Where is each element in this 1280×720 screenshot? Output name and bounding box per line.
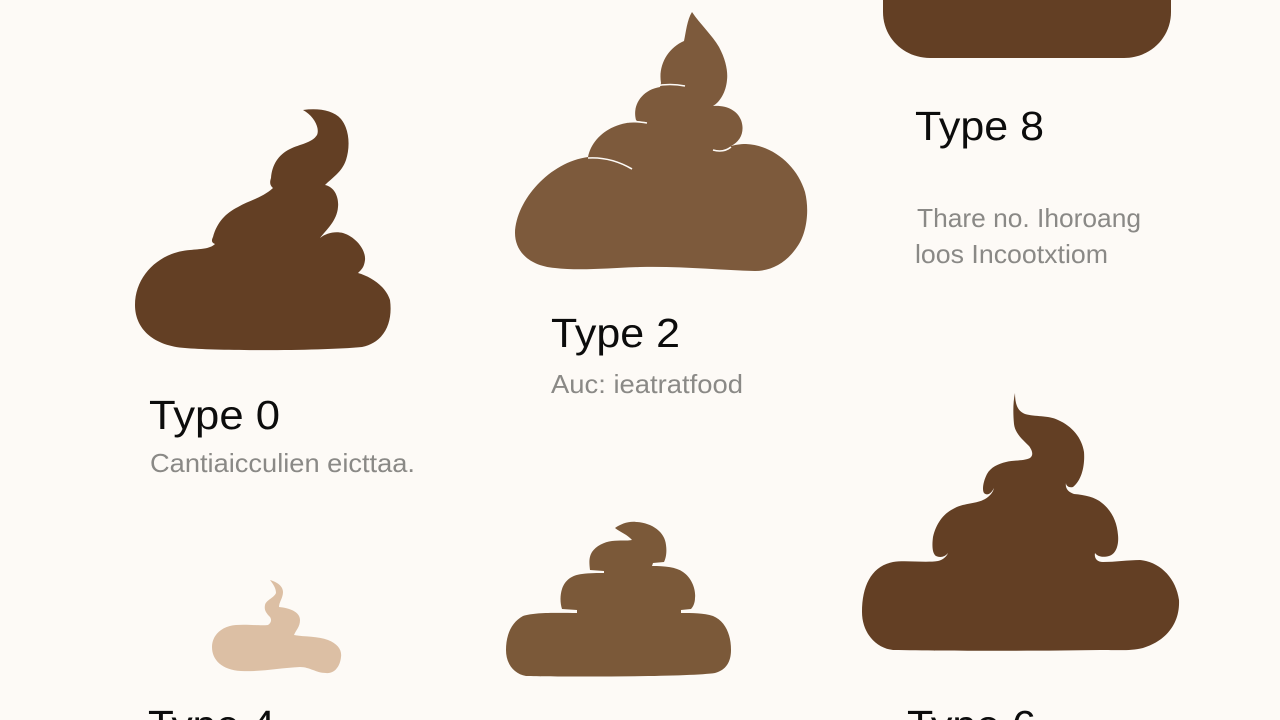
icon: type 6 dark brown swirl [862,393,1179,651]
icon: type 0 dark brown swirl [135,109,391,350]
text: type 0 description: Cantiaicculien eicttaa. [150,448,415,478]
panel: type 2 [515,12,807,399]
panel: type 8 [883,0,1171,269]
icon: type 4 pale tan swirl [212,580,341,673]
icon: type 3 medium brown tiered swirl [506,522,731,677]
panel: type 3 [506,522,731,677]
heading: type 2: Type 2 [551,310,680,356]
panel: type 0 [135,109,415,478]
panel: type 4 [148,580,341,720]
text: type 8 description line 2: loos Incootxtiom [915,239,1108,269]
text: type 8 description: Thare no. Ihoroang [917,203,1141,233]
panel: type 6 [862,393,1179,720]
heading: type 0: Type 0 [149,392,280,438]
heading: type 8: Type 8 [915,103,1044,149]
icon: type 8 cropped dark brown base [883,0,1171,58]
icon: type 2 medium brown swirl [515,12,807,271]
text: type 2 description: Auc: ieatratfood [551,369,743,399]
